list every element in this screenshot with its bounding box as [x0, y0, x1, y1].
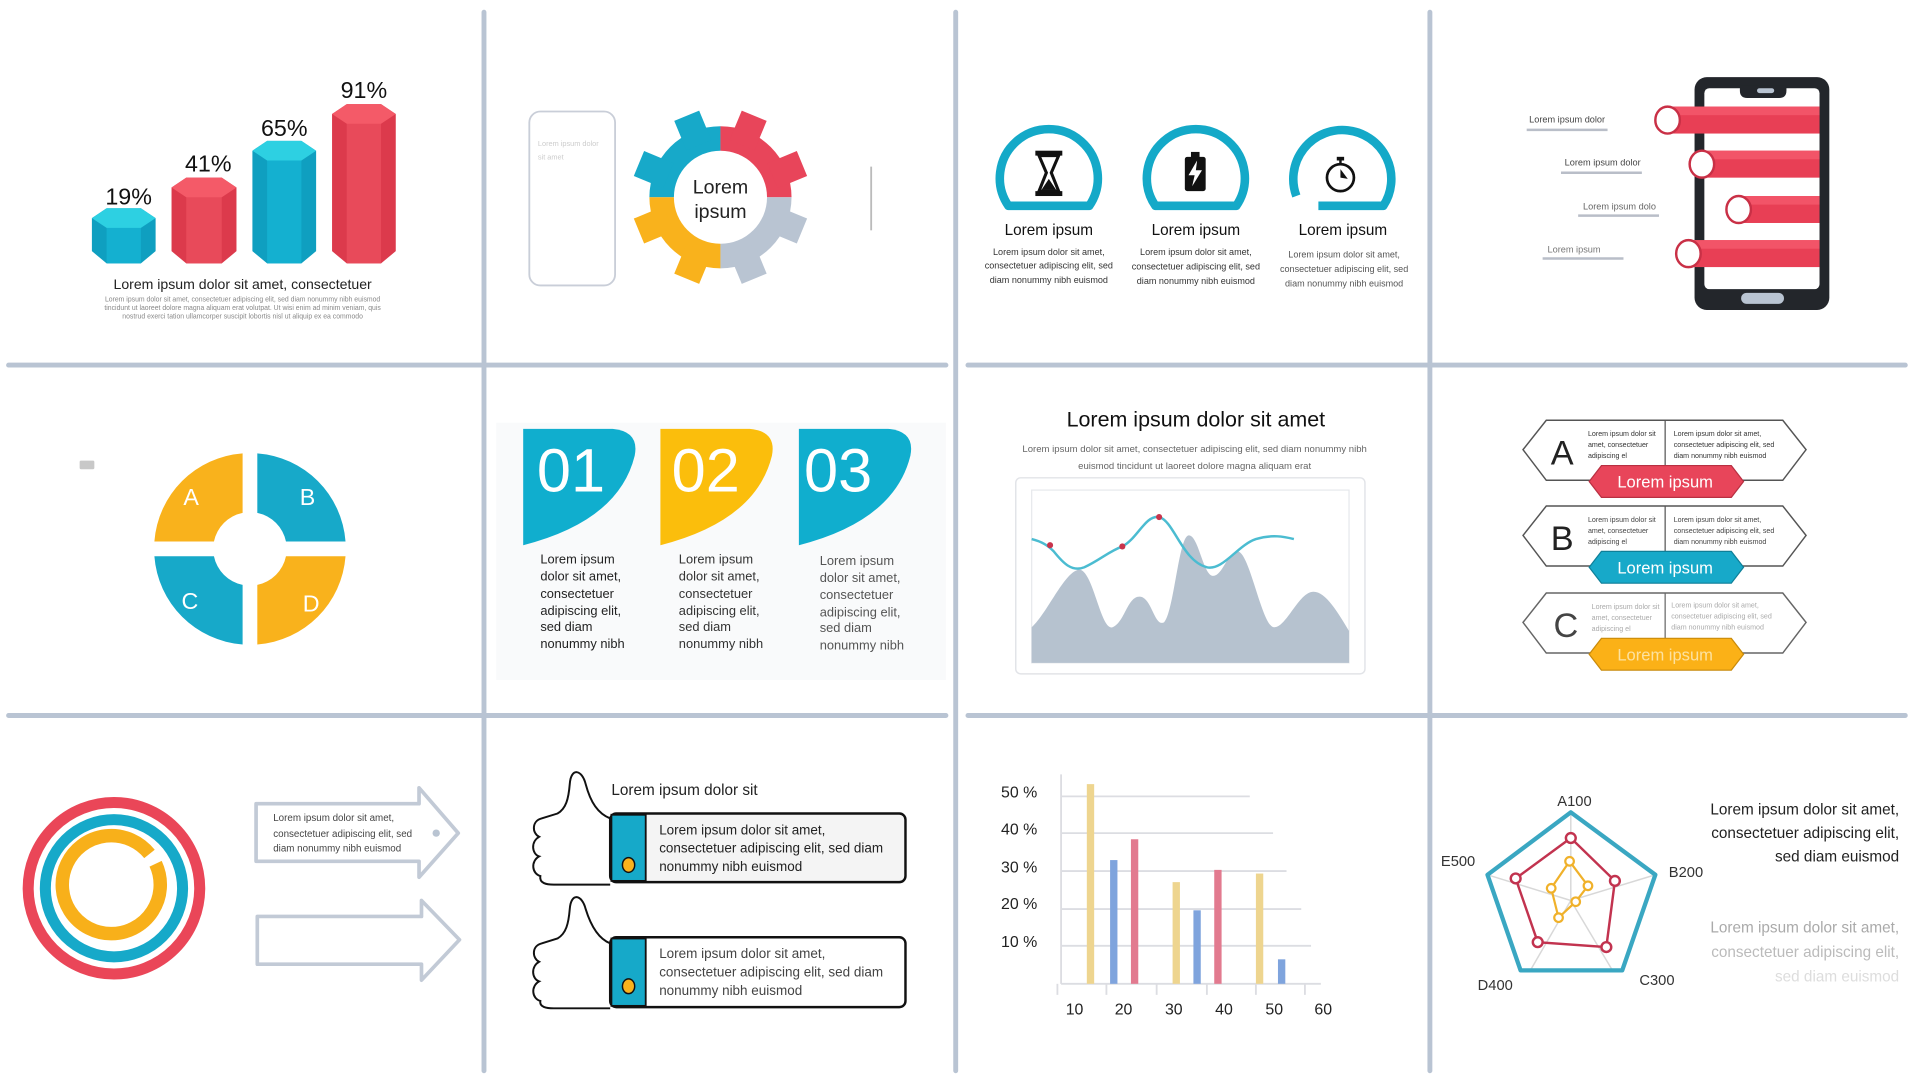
chart subtitle: Lorem ipsum dolor sit amet, consectetuer adipiscing elit, sed diam nonummy nibh — [1022, 444, 1367, 455]
row A: amet, consectetuer — [1588, 441, 1649, 449]
radar text: consectetuer adipiscing elit, — [1711, 944, 1899, 961]
gear icon: Lorem — [693, 177, 748, 199]
item: battery — [1132, 129, 1260, 286]
item: battery: consectetuer adipiscing elit, sed — [1132, 262, 1260, 272]
radar labels: D400 — [1478, 978, 1513, 994]
bar 91%: 91% — [341, 77, 387, 103]
row B: amet, consectetuer — [1588, 527, 1649, 535]
radar labels: C300 — [1639, 973, 1675, 989]
item: hourglass — [985, 129, 1113, 285]
item: hourglass: diam nonummy nibh euismod — [990, 275, 1108, 285]
thumb card 2: consectetuer adipiscing elit, sed diam — [659, 964, 883, 979]
faint phone card: sit amet — [538, 152, 564, 161]
row C: C — [1554, 607, 1578, 645]
item: stopwatch: consectetuer adipiscing elit, sed — [1280, 264, 1408, 274]
heading: Lorem ipsum dolor sit — [611, 782, 758, 799]
radar text — [1710, 802, 1899, 985]
axis labels: 60 — [1314, 1001, 1332, 1018]
radar labels: B200 — [1669, 865, 1703, 881]
row A — [1523, 420, 1806, 497]
segment D: D — [303, 590, 320, 616]
panel: numbered tabs — [496, 423, 946, 680]
tab 03 — [799, 429, 911, 652]
chart subtitle — [1022, 444, 1367, 472]
tab 03: Lorem ipsum — [820, 553, 894, 568]
thumb card 2: Lorem ipsum dolor sit amet, — [659, 946, 825, 961]
bar 19% — [92, 184, 156, 263]
tab 01: adipiscing elit, — [540, 603, 621, 618]
tab 03: sed diam — [820, 620, 872, 635]
row B: Lorem ipsum dolor sit amet, — [1674, 516, 1761, 524]
phone — [1695, 77, 1829, 310]
row B: consectetuer adipiscing elit, sed — [1674, 527, 1774, 535]
chart title: Lorem ipsum dolor sit amet — [1067, 407, 1325, 431]
bar 91% — [332, 77, 396, 263]
tab 02: dolor sit amet, — [679, 569, 760, 584]
panel: ABC hex rows — [1523, 420, 1806, 670]
thumb card 1: consectetuer adipiscing elit, sed diam — [659, 841, 883, 856]
row B: diam nonummy nibh euismod — [1674, 538, 1766, 546]
tab 03: dolor sit amet, — [820, 570, 900, 585]
panel: rings and arrows — [28, 788, 459, 980]
radar text: consectetuer adipiscing elit, — [1711, 825, 1899, 842]
tab 02: consectetuer — [679, 586, 753, 601]
panel: area chart — [1016, 407, 1367, 674]
tab 01: consectetuer — [540, 586, 615, 601]
segment C — [154, 556, 243, 644]
bar 65%: 65% — [261, 115, 308, 141]
panel: ABCD ring — [80, 453, 346, 644]
thumb card 2 — [533, 897, 905, 1008]
axis labels: 30 % — [1001, 859, 1037, 876]
axis labels: 50 — [1265, 1001, 1283, 1018]
bar labels: Lorem ipsum dolor — [1565, 157, 1641, 167]
item: battery: Lorem ipsum dolor sit amet, — [1140, 247, 1252, 257]
radar labels — [1441, 794, 1703, 994]
row A: diam nonummy nibh euismod — [1674, 452, 1766, 460]
bar 41% — [172, 151, 236, 263]
row A: consectetuer adipiscing elit, sed — [1674, 441, 1774, 449]
panel: hexagonal bar chart — [92, 77, 396, 321]
segment D — [257, 556, 346, 644]
row A: Lorem ipsum — [1617, 473, 1713, 492]
row C: amet, consectetuer — [1592, 614, 1653, 622]
tab 03: adipiscing elit, — [820, 604, 900, 619]
chart subtitle: euismod tincidunt ut laoreet dolore magna aliquam erat — [1078, 461, 1311, 472]
row C — [1523, 593, 1806, 670]
concentric rings — [28, 802, 200, 974]
gear icon: ipsum — [694, 201, 747, 223]
radar labels: A100 — [1557, 794, 1592, 810]
bars — [1087, 784, 1285, 984]
tab 03: 03 — [804, 436, 872, 504]
segment A: A — [183, 484, 199, 510]
item: hourglass: Lorem ipsum — [1005, 222, 1093, 239]
faint phone card: Lorem ipsum dolor — [538, 139, 599, 148]
row B: Lorem ipsum dolor sit — [1588, 516, 1656, 524]
bar labels — [1527, 115, 1659, 259]
axis labels: 50 % — [1001, 785, 1037, 802]
item: stopwatch — [1280, 130, 1408, 289]
caption: tincidunt ut laoreet dolore magna aliquam erat volutpat. Ut wisi enim ad minim veniam, quis — [104, 305, 381, 312]
item: stopwatch: Lorem ipsum — [1299, 222, 1387, 239]
axis labels: 40 — [1215, 1001, 1233, 1018]
row C: Lorem ipsum dolor sit amet, — [1671, 602, 1759, 610]
red series — [1511, 833, 1620, 952]
axis labels: 40 % — [1001, 821, 1037, 838]
row B — [1523, 506, 1806, 583]
arrow 2 — [257, 901, 459, 980]
gear icon — [634, 111, 807, 284]
outer pentagon — [1487, 812, 1655, 970]
arrow 1 with text: consectetuer adipiscing elit, sed — [273, 829, 412, 840]
yellow series — [1547, 857, 1592, 922]
thumb card 1: Lorem ipsum dolor sit amet, — [659, 822, 825, 837]
segment A — [154, 453, 243, 542]
item: hourglass: Lorem ipsum dolor sit amet, — [993, 247, 1105, 257]
radar text: sed diam euismod — [1775, 848, 1899, 865]
tab 02: Lorem ipsum — [679, 552, 753, 567]
caption — [104, 276, 381, 321]
axis labels: 20 % — [1001, 896, 1037, 913]
panel: three dome icons — [985, 129, 1408, 289]
row A: Lorem ipsum dolor sit — [1588, 430, 1656, 438]
axis labels: 10 % — [1001, 934, 1037, 951]
item: stopwatch: diam nonummy nibh euismod — [1285, 279, 1403, 289]
tab 01: sed diam — [540, 619, 593, 634]
axis labels: 10 — [1066, 1001, 1084, 1018]
item: battery: Lorem ipsum — [1152, 222, 1240, 239]
tab 02 — [660, 429, 773, 651]
bar labels: Lorem ipsum dolor — [1529, 115, 1605, 125]
caption: Lorem ipsum dolor sit amet, consectetuer adipiscing elit, sed diam nonummy nibh euismod — [105, 296, 380, 303]
bar 41%: 41% — [185, 151, 232, 177]
row B: adipiscing el — [1588, 538, 1627, 546]
tab 01: 01 — [537, 436, 605, 504]
arrow 1 with text: diam nonummy nibh euismod — [273, 844, 401, 855]
item: hourglass: consectetuer adipiscing elit, sed — [985, 260, 1113, 270]
segment B — [257, 453, 346, 542]
tab 01 — [523, 429, 635, 651]
tab 02: adipiscing elit, — [679, 603, 760, 618]
tab 01: dolor sit amet, — [540, 569, 621, 584]
tab 01: nonummy nibh — [540, 636, 625, 651]
panel: thumbs up — [533, 772, 905, 1008]
arrow 1 with text: Lorem ipsum dolor sit amet, — [273, 813, 394, 824]
tab 03: nonummy nibh — [820, 637, 904, 652]
row C: consectetuer adipiscing elit, sed — [1671, 613, 1772, 621]
thumb card 1 — [533, 772, 905, 885]
radar text: sed diam euismod — [1775, 968, 1899, 985]
chart frame — [1016, 478, 1365, 674]
panel: phone with bars — [1527, 77, 1829, 310]
segment B: B — [300, 484, 315, 510]
thumb card 1: nonummy nibh euismod — [659, 859, 802, 874]
bar 19%: 19% — [105, 184, 152, 210]
tab 02: 02 — [672, 436, 740, 504]
icon: small — [80, 461, 94, 469]
radar text: Lorem ipsum dolor sit amet, — [1710, 919, 1899, 936]
row C: Lorem ipsum — [1617, 645, 1713, 664]
bar 65% — [252, 115, 316, 263]
radar labels: E500 — [1441, 854, 1475, 870]
radar text: Lorem ipsum dolor sit amet, — [1710, 802, 1899, 819]
row A: adipiscing el — [1588, 452, 1627, 460]
axis labels — [1001, 785, 1332, 1018]
bar labels: Lorem ipsum dolo — [1583, 202, 1656, 212]
row C: diam nonummy nibh euismod — [1671, 624, 1764, 632]
row C: adipiscing el — [1592, 625, 1631, 633]
tab 02: sed diam — [679, 619, 731, 634]
row B: Lorem ipsum — [1617, 558, 1713, 577]
panel: bar chart — [1001, 774, 1332, 1018]
bars — [1655, 107, 1820, 267]
tab 03: consectetuer — [820, 587, 894, 602]
axis labels: 30 — [1165, 1001, 1183, 1018]
caption: Lorem ipsum dolor sit amet, consectetuer — [113, 276, 372, 292]
segment C: C — [182, 588, 198, 614]
panel: radar chart — [1441, 794, 1899, 994]
faint phone card — [529, 111, 615, 285]
row B: B — [1551, 520, 1574, 558]
item: battery: diam nonummy nibh euismod — [1137, 276, 1255, 286]
row C: Lorem ipsum dolor sit — [1592, 603, 1659, 611]
caption: nostrud exerci tation ullamcorper suscipit lobortis nisl ut aliquip ex ea commodo — [122, 314, 363, 321]
tab 01: Lorem ipsum — [540, 552, 615, 567]
row A: Lorem ipsum dolor sit amet, — [1674, 430, 1761, 438]
thumb card 2: nonummy nibh euismod — [659, 983, 802, 998]
arrow 1 with text — [256, 788, 458, 877]
tab 02: nonummy nibh — [679, 636, 763, 651]
row A: A — [1551, 434, 1574, 472]
bar labels: Lorem ipsum — [1548, 244, 1601, 254]
axis labels: 20 — [1115, 1001, 1133, 1018]
item: stopwatch: Lorem ipsum dolor sit amet, — [1288, 249, 1400, 259]
panel: gear — [529, 111, 871, 285]
